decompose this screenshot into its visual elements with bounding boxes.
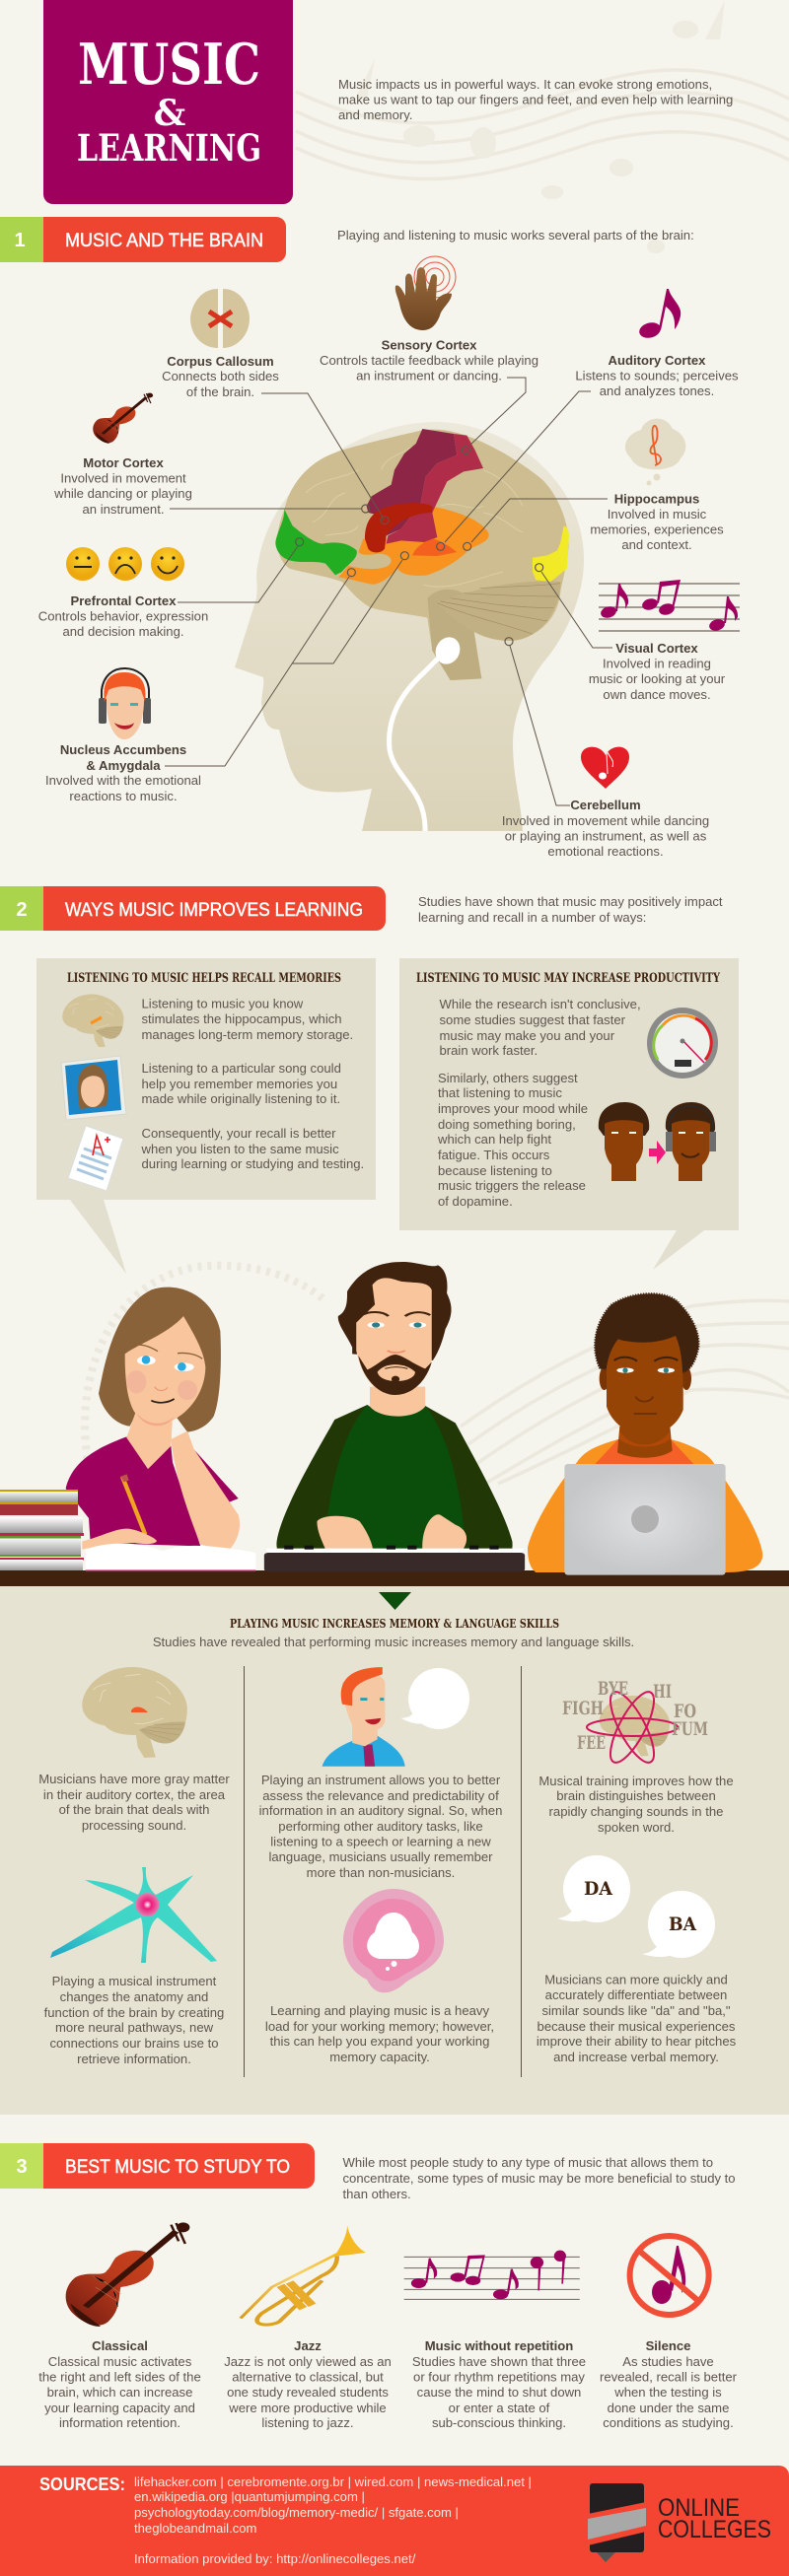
label: motor cortex: Involved in movement: [60, 471, 186, 485]
icon: music note: [637, 289, 681, 340]
character: girl: [66, 1288, 255, 1570]
text: improves mood: music triggers the release: [438, 1178, 586, 1193]
section 3 intro text: than others.: [343, 2187, 411, 2201]
section 3 banner: [0, 2143, 315, 2189]
text: improves mood: Similarly, others suggest: [438, 1071, 578, 1085]
section 3 banner: BEST MUSIC TO STUDY TO: [65, 2157, 290, 2178]
text: hippocampus: manages long-term memory storage.: [142, 1027, 353, 1042]
label: hippocampus: [590, 419, 724, 552]
text: faster music: some studies suggest that faster: [440, 1012, 626, 1027]
column: jazz: [224, 2225, 392, 2430]
text: gray matter: in their auditory cortex, the area: [43, 1787, 226, 1802]
text: musical training: Musical training improves how the: [538, 1774, 734, 1788]
icon: small brain: [62, 995, 123, 1047]
title: Music: MUSIC: [78, 32, 260, 98]
icon: brain with orbiting words: FUM: [672, 1718, 708, 1740]
text: neural pathways: connections our brains use to: [49, 2036, 219, 2051]
logo: online colleges: ONLINE: [658, 2494, 740, 2522]
icon: DA speech bubble: [557, 1855, 630, 1922]
icon: pink arrow: [649, 1141, 666, 1164]
label: visual cortex: music or looking at your: [589, 671, 726, 686]
text: improves mood: [437, 1071, 588, 1209]
label: prefrontal cortex: Prefrontal Cortex: [71, 593, 177, 608]
text: working memory: [265, 2003, 494, 2064]
text: neural pathways: changes the anatomy and: [60, 1989, 208, 2004]
text: musical training: spoken word.: [598, 1820, 675, 1835]
label: prefrontal cortex: Controls behavior, expression: [38, 609, 208, 623]
column: silence: Silence: [646, 2338, 690, 2353]
icon: small violin: [93, 393, 153, 444]
text: instrument relevance: information in an auditory signal. So, when: [259, 1803, 502, 1818]
icon: trumpet: [241, 2225, 366, 2325]
sources list: [134, 2474, 532, 2566]
character: bearded man at keyboard: [264, 1262, 525, 1571]
desk: [0, 1570, 789, 1586]
leader lines: [165, 378, 612, 805]
text: da and ba: improve their ability to hear pitches: [537, 2034, 737, 2049]
text: working memory: Learning and playing music is a heavy: [270, 2003, 489, 2018]
column: silence: done under the same: [608, 2401, 729, 2415]
label: motor cortex: an instrument.: [83, 502, 164, 517]
character: young man with laptop: [528, 1293, 762, 1575]
label: cerebellum: emotional reactions.: [547, 844, 664, 859]
label: nucleus accumbens and amygdala: Nucleus Accumbens: [60, 742, 186, 757]
sources list: en.wikipedia.org |quantumjumping.com |: [134, 2489, 365, 2504]
icon: split brain: [190, 289, 250, 348]
icon: tired head: [599, 1102, 649, 1181]
region: orange limbic: [338, 506, 489, 585]
section 3 intro text: concentrate, some types of music may be more beneficial to study to: [343, 2171, 736, 2186]
section 1 banner: 1: [14, 230, 26, 251]
text: da and ba: similar sounds like "da" and "ba,": [541, 2003, 731, 2018]
icon: happy head with headphones: [666, 1102, 716, 1181]
section 2 intro text: [418, 894, 723, 925]
text: instrument relevance: performing other auditory tasks, like: [278, 1819, 483, 1834]
text: improves mood: improves your mood while: [438, 1101, 588, 1116]
panel subheading: Studies have revealed that performing music increases memory and language skills.: [153, 1635, 634, 1649]
icon: DA speech bubble: DA: [584, 1878, 612, 1900]
text: working memory: this can help you expand your working: [270, 2034, 489, 2049]
label: auditory cortex: Listens to sounds; perceives: [575, 369, 739, 383]
logo: online colleges: [588, 2483, 771, 2562]
column: jazz: Jazz is not only viewed as an: [224, 2354, 392, 2369]
text: instrument relevance: assess the relevance and predictability of: [262, 1788, 499, 1803]
label: corpus callosum: Connects both sides: [162, 369, 279, 383]
label: cerebellum: Cerebellum: [570, 798, 641, 812]
text: hippocampus: [142, 997, 353, 1042]
panel: recall memories: [36, 958, 376, 1274]
label: motor cortex: while dancing or playing: [53, 486, 192, 501]
text: da and ba: because their musical experiences: [538, 2019, 736, 2034]
intro paragraph: and memory.: [338, 107, 412, 122]
footer: sources: [0, 2466, 789, 2576]
column: jazz: Jazz: [294, 2338, 322, 2353]
icon: brain with orbiting words: [562, 1678, 708, 1768]
background: swirl behind students: [85, 1266, 789, 1484]
label: visual cortex: own dance moves.: [603, 687, 711, 702]
text: gray matter: Musicians have more gray matter: [38, 1772, 230, 1786]
icon: photo of girl: [61, 1056, 126, 1120]
column: silence: when the testing is: [613, 2385, 722, 2400]
column: jazz: listening to jazz.: [261, 2415, 354, 2430]
text: particular song: help you remember memories you: [142, 1077, 337, 1091]
column: silence: [600, 2236, 738, 2430]
text: faster music: music may make you and your: [440, 1028, 615, 1043]
title block: [43, 0, 293, 204]
text: consequently: Consequently, your recall is better: [142, 1126, 336, 1141]
icon: smiling man with headphones: [99, 668, 151, 739]
icon: thought cloud with clef: [625, 419, 685, 485]
section 3 intro text: [343, 2155, 736, 2201]
icon: no music sign: [630, 2236, 709, 2315]
icon: neuron: [50, 1867, 217, 1963]
head silhouette: [235, 422, 584, 831]
column: silence: conditions as studying.: [603, 2415, 734, 2430]
column: classical: the right and left sides of the: [38, 2370, 201, 2384]
column: music without repetition: cause the mind to shut down: [417, 2385, 581, 2400]
text: improves mood: fatigue. This occurs: [438, 1148, 550, 1162]
text: neural pathways: Playing a musical instrument: [52, 1974, 217, 1988]
text: faster music: While the research isn't conclusive,: [440, 997, 641, 1011]
icon: speedometer gauge: [647, 1008, 718, 1079]
icon: graded paper: [68, 1126, 123, 1191]
icon: emoji faces: [66, 547, 184, 581]
logo: online colleges: COLLEGES: [658, 2516, 771, 2543]
icon: violin: [66, 2222, 189, 2327]
label: corpus callosum: Corpus Callosum: [167, 354, 274, 369]
speech tail: right panel: [653, 1230, 704, 1270]
background: music staff swirl top: [296, 0, 789, 253]
column: classical: Classical music activates: [48, 2354, 192, 2369]
title: Learning: LEARNING: [77, 126, 261, 170]
panel heading: PLAYING MUSIC INCREASES MEMORY & LANGUAGE SKILLS: [230, 1617, 559, 1631]
label: hippocampus: and context.: [621, 537, 692, 552]
text: gray matter: [38, 1772, 230, 1833]
column: classical: [38, 2222, 201, 2430]
title: ampersand: &: [154, 93, 185, 134]
green triangle: [379, 1592, 411, 1610]
earbud and cord: [390, 633, 465, 831]
text: instrument relevance: listening to a speech or learning a new: [270, 1834, 491, 1849]
text: instrument relevance: Playing an instrument allows you to better: [261, 1773, 501, 1787]
section 2 banner: 2: [16, 899, 28, 921]
column: music without repetition: Music without repetition: [425, 2338, 573, 2353]
label: corpus callosum: [162, 289, 279, 399]
text: neural pathways: more neural pathways, new: [55, 2020, 214, 2035]
text: da and ba: [537, 1972, 737, 2064]
region: dark purple sensory: [367, 429, 457, 535]
sources list: theglobeandmail.com: [134, 2521, 257, 2536]
label: auditory cortex: and analyzes tones.: [600, 383, 714, 398]
text: hippocampus: stimulates the hippocampus, which: [142, 1011, 342, 1026]
text: musical training: rapidly changing sounds in the: [549, 1804, 723, 1819]
label: nucleus accumbens and amygdala: reactions to music.: [69, 789, 178, 803]
section 3 intro text: While most people study to any type of music that allows them to: [343, 2155, 713, 2170]
text: faster music: brain work faster.: [440, 1043, 538, 1058]
label: motor cortex: Motor Cortex: [83, 455, 164, 470]
sources list: lifehacker.com | cerebromente.org.br | wired.com | news-medical.net |: [134, 2474, 532, 2489]
sources heading: SOURCES:: [39, 2474, 125, 2494]
section 1 banner: MUSIC AND THE BRAIN: [65, 231, 263, 251]
panel: playing music increases memory: [0, 1586, 789, 2115]
text: neural pathways: [44, 1974, 224, 2066]
text: neural pathways: retrieve information.: [77, 2052, 191, 2066]
column: classical: Classical: [92, 2338, 148, 2353]
section 3 banner: 3: [16, 2156, 28, 2178]
column: silence: revealed, recall is better: [600, 2370, 738, 2384]
section 2 intro text: learning and recall in a number of ways:: [418, 910, 646, 925]
speech tail: left panel: [70, 1200, 126, 1274]
panel heading: LISTENING TO MUSIC HELPS RECALL MEMORIES: [67, 971, 341, 986]
column: jazz: were more productive while: [228, 2401, 387, 2415]
label: visual cortex: Involved in reading: [603, 657, 711, 670]
icon: brain with orbiting words: HI: [653, 1681, 672, 1703]
head and brain diagram: [235, 422, 584, 831]
label: prefrontal cortex: and decision making.: [62, 624, 184, 639]
icon: pink thought cloud: [343, 1889, 444, 1992]
column: music without repetition: or enter a state of: [449, 2401, 550, 2415]
brain with coloured regions: [275, 429, 569, 680]
region: crimson motor: [387, 434, 483, 544]
section 1 banner: [0, 217, 286, 262]
icon: brain with orbiting words: BYE: [598, 1678, 628, 1700]
book stack: [0, 1490, 84, 1570]
icon: brain with orbiting words: FO: [674, 1701, 696, 1722]
text: working memory: load for your working memory; however,: [265, 2019, 494, 2034]
icon: BA speech bubble: [642, 1891, 715, 1958]
panel: increase productivity: [399, 958, 739, 1270]
label: prefrontal cortex: [38, 547, 208, 639]
icon: staff with notes: [404, 2251, 580, 2299]
icon: music staff: [599, 580, 740, 632]
text: gray matter: of the brain that deals with: [59, 1802, 209, 1817]
text: instrument relevance: [259, 1773, 502, 1880]
column: music without repetition: sub-conscious thinking.: [432, 2415, 566, 2430]
label: hippocampus: Hippocampus: [614, 491, 699, 507]
region: yellow visual: [533, 525, 569, 582]
text: consequently: during learning or studying and testing.: [142, 1156, 364, 1171]
column: classical: brain, which can increase: [47, 2385, 192, 2400]
text: hippocampus: Listening to music you know: [142, 997, 304, 1011]
sources list: psychologytoday.com/blog/memory-medic/ | sfgate.com |: [134, 2505, 459, 2520]
label: motor cortex: [53, 393, 192, 517]
intro paragraph: [338, 77, 733, 122]
label: hippocampus: memories, experiences: [590, 522, 724, 536]
label: auditory cortex: [575, 289, 739, 398]
text: instrument relevance: more than non-musicians.: [307, 1865, 455, 1880]
label: sensory cortex: Sensory Cortex: [382, 337, 477, 353]
column: music without repetition: Studies have shown that three: [412, 2354, 586, 2369]
column: silence: As studies have: [622, 2354, 714, 2369]
text: particular song: [142, 1061, 341, 1106]
label: auditory cortex: Auditory Cortex: [609, 353, 706, 368]
text: da and ba: Musicians can more quickly and: [544, 1972, 728, 1987]
label: cerebellum: [502, 747, 709, 859]
label: sensory cortex: Controls tactile feedback while playing: [320, 353, 538, 368]
text: working memory: memory capacity.: [329, 2050, 430, 2064]
text: faster music: [440, 997, 641, 1058]
sources list: Information provided by: http://onlinecolleges.net/: [134, 2551, 416, 2566]
column: music without repetition: or four rhythm repetitions may: [413, 2370, 585, 2384]
text: musical training: brain distinguishes between: [556, 1788, 716, 1803]
text: da and ba: and increase verbal memory.: [553, 2050, 719, 2064]
intro paragraph: make us want to tap our fingers and feet, and even help with learning: [338, 93, 733, 106]
icon: talking man with speech bubble: [323, 1667, 469, 1767]
intro paragraph: Music impacts us in powerful ways. It can evoke strong emotions,: [338, 77, 712, 92]
callout markers: [296, 447, 543, 646]
icon: heart with note: [581, 747, 629, 789]
text: instrument relevance: language, musicians usually remember: [268, 1849, 493, 1864]
column: classical: information retention.: [59, 2415, 180, 2430]
icon: brain with orbiting words: FIGH: [562, 1698, 604, 1719]
text: improves mood: which can help fight: [437, 1132, 551, 1147]
text: improves mood: doing something boring,: [438, 1117, 576, 1132]
label: visual cortex: Visual Cortex: [615, 641, 698, 656]
text: musical training: [538, 1774, 734, 1835]
label: nucleus accumbens and amygdala: & Amygdala: [86, 758, 161, 773]
column: jazz: one study revealed students: [227, 2385, 389, 2400]
text: gray matter: processing sound.: [82, 1818, 186, 1833]
text: da and ba: accurately differentiate between: [545, 1987, 727, 2002]
icon: BA speech bubble: BA: [669, 1914, 696, 1935]
label: corpus callosum: of the brain.: [186, 384, 254, 399]
region: green prefrontal: [275, 510, 357, 575]
text: improves mood: because listening to: [438, 1163, 552, 1178]
section 2 intro text: Studies have shown that music may positively impact: [418, 894, 723, 909]
column: music without repetition: [404, 2251, 586, 2430]
text: particular song: made while originally listening to it.: [142, 1091, 340, 1106]
region: red arc: [365, 503, 432, 552]
region: auditory orange-red: [412, 539, 457, 556]
label: cerebellum: or playing an instrument, as well as: [505, 828, 707, 844]
label: sensory cortex: an instrument or dancing.: [356, 369, 502, 383]
section 1 intro text: Playing and listening to music works several parts of the brain:: [337, 228, 694, 243]
column: classical: your learning capacity and: [44, 2401, 195, 2415]
section 2 banner: WAYS MUSIC IMPROVES LEARNING: [65, 900, 363, 921]
label: nucleus accumbens and amygdala: Involved with the emotional: [45, 773, 201, 788]
icon: brain with orange auditory cortex: [82, 1667, 187, 1758]
label: hippocampus: Involved in music: [608, 507, 707, 522]
text: improves mood: of dopamine.: [438, 1194, 513, 1209]
icon: hand with touch rings: [395, 256, 456, 330]
text: consequently: when you listen to the same music: [140, 1142, 339, 1156]
text: particular song: Listening to a particular song could: [142, 1061, 341, 1076]
label: nucleus accumbens and amygdala: [45, 668, 201, 803]
column: jazz: alternative to classical, but: [232, 2370, 384, 2384]
section 2 banner: [0, 886, 386, 931]
text: consequently: [140, 1126, 364, 1171]
icon: brain with orbiting words: FEE: [577, 1732, 606, 1754]
text: improves mood: that listening to music: [438, 1085, 562, 1100]
label: sensory cortex: [320, 256, 538, 383]
text: neural pathways: function of the brain by creating: [44, 2005, 224, 2020]
label: cerebellum: Involved in movement while dancing: [502, 813, 709, 828]
label: visual cortex: [589, 580, 740, 702]
